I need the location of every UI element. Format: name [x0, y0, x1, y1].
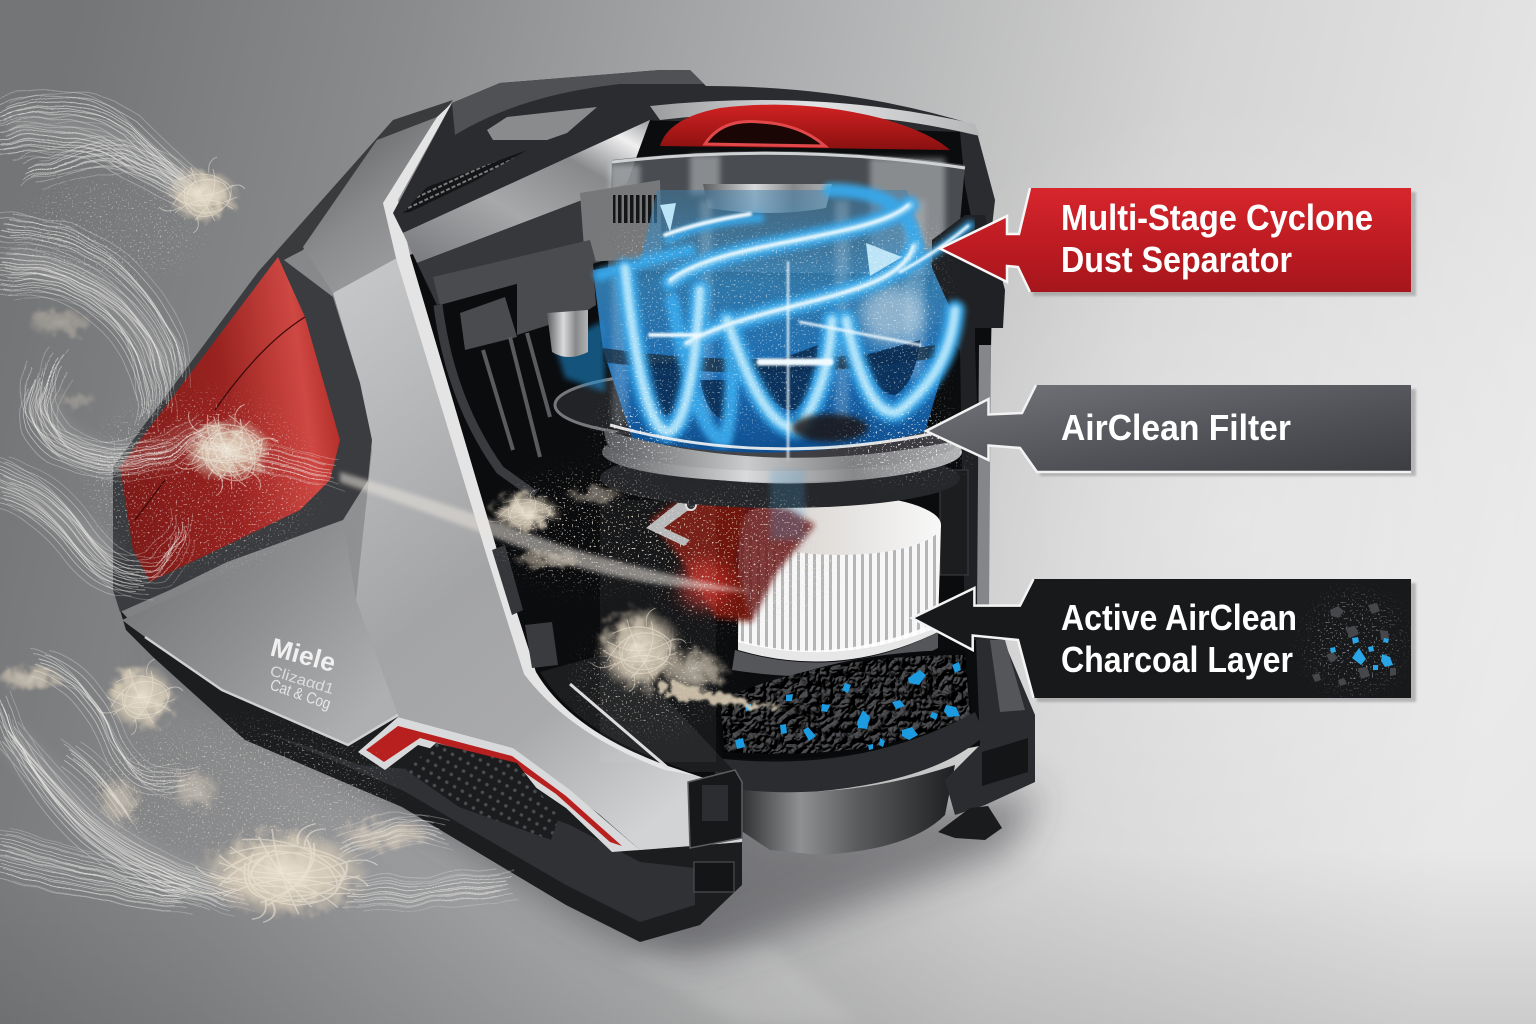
- base: dark lower shell: [120, 610, 742, 942]
- lid arch: [705, 121, 825, 146]
- inner clump upper: [489, 485, 625, 570]
- foot vent: [982, 738, 1028, 786]
- top handle: [393, 70, 995, 290]
- blue glow behind chrome: [555, 320, 605, 392]
- red lid: [660, 105, 950, 150]
- glass bucket collar: [608, 151, 965, 275]
- handle grip opening: [487, 107, 597, 140]
- charcoal bed: [715, 650, 972, 759]
- inner clump lower: [596, 606, 785, 708]
- soft haze: [0, 125, 310, 883]
- channel highlight line: [570, 684, 668, 768]
- hood strip: [650, 100, 980, 136]
- dark collar band: [603, 345, 935, 373]
- front dark channel: [540, 650, 735, 772]
- dust clumps, left: [0, 125, 686, 946]
- bright highlights: [650, 205, 968, 460]
- interior cavity: [410, 120, 992, 790]
- left assembly blocks: [433, 240, 596, 350]
- vacuum cleaner body: [113, 100, 742, 942]
- pale glass patch: [860, 285, 924, 345]
- foot highlight: [990, 640, 1025, 712]
- icon: foot block vent: [694, 862, 734, 892]
- inner cup: [703, 184, 832, 213]
- right foot housing: [945, 632, 1035, 815]
- front foot block: [688, 770, 742, 848]
- brand marking: Cat & Cog: [268, 677, 333, 713]
- outer dark spine: [258, 100, 453, 272]
- red side panel border: [113, 257, 372, 612]
- cyclone funnel body: [593, 190, 957, 453]
- filter rim over airflow: [604, 414, 960, 540]
- callout: AirClean Filter: [926, 385, 1416, 476]
- red internal part: [650, 478, 815, 622]
- wide blue bands: [600, 190, 970, 440]
- base: underside highlight: [260, 730, 695, 922]
- callout: Active AirClean Charcoal Layer: Active AirClean: [1061, 597, 1297, 638]
- air stream: [340, 472, 755, 592]
- lower left silver panel: [122, 520, 398, 745]
- grey bracket: [646, 498, 694, 546]
- bracket pin: [686, 500, 696, 510]
- charcoal tray: [715, 712, 985, 795]
- clump fills: [0, 167, 435, 919]
- base cylinder: [740, 765, 955, 855]
- panel rim highlight: [145, 637, 398, 745]
- brand marking: Clizaαd1: [268, 663, 336, 698]
- dark pockets: [645, 340, 920, 420]
- brand marking: [267, 632, 339, 713]
- column trim: [977, 345, 991, 610]
- upper grey shell: [303, 117, 437, 293]
- rubber foot: [938, 806, 1002, 840]
- dust stream and clumps: [340, 472, 785, 708]
- callout: Active AirClean Charcoal Layer: Charcoal Layer: [1061, 639, 1293, 680]
- scattered flecks: [20, 180, 390, 855]
- cutaway interior: [393, 70, 1035, 855]
- callout: Active AirClean Charcoal Layer: [912, 579, 1416, 702]
- translucent dust column: [600, 500, 716, 762]
- blue charcoal pieces: [735, 662, 961, 750]
- floor shadow: [150, 620, 1040, 1024]
- fine specks in cyclone: [620, 230, 940, 430]
- glass light bars: [610, 155, 945, 260]
- main light silver panel: [333, 258, 742, 850]
- dark block under hood: [417, 183, 660, 305]
- glass rim: [612, 153, 965, 168]
- light blue inner bands: [625, 205, 955, 432]
- red side panel: [120, 257, 340, 582]
- right side column: [932, 215, 1005, 640]
- motor block with vent: [580, 180, 662, 262]
- clump fibres: [97, 157, 686, 946]
- white front trim: [383, 103, 742, 784]
- dust particle clouds: [500, 407, 965, 730]
- chrome cylinder: [547, 310, 588, 357]
- icon: charcoal granules: [1307, 595, 1403, 691]
- red panel crease: [135, 317, 305, 520]
- callout: AirClean Filter: AirClean Filter: [1061, 407, 1291, 448]
- lower interior wall: [940, 470, 968, 575]
- callout: Multi-Stage Cyclone Dust Separator: Dust Separator: [1061, 239, 1292, 280]
- disc and airclean filter stage: [600, 413, 962, 508]
- callout: Multi-Stage Cyclone Dust Separator: [940, 188, 1416, 296]
- blue cyclone airflow: [593, 190, 970, 460]
- top vent: [403, 150, 527, 213]
- motor vent grille: [613, 195, 657, 223]
- small inner vent: [525, 622, 558, 668]
- red stripe and grille: [358, 717, 640, 852]
- curved inner band: [438, 305, 535, 495]
- back disc: [555, 373, 825, 437]
- silver hood band: [403, 120, 650, 263]
- handle upper highlight: [452, 70, 704, 135]
- glass vertical streaks: [612, 200, 925, 425]
- brand marking: Miele: [267, 632, 339, 678]
- hair and dust swirls, left: [0, 89, 518, 915]
- rib lines: [483, 333, 550, 457]
- flow arrowheads: [660, 203, 902, 276]
- front foot window: [702, 785, 728, 821]
- HEPA filter: [732, 495, 941, 676]
- callout: Multi-Stage Cyclone Dust Separator: Multi-Stage Cyclone: [1061, 197, 1373, 238]
- side slot: [492, 545, 523, 615]
- red glow: [679, 561, 731, 609]
